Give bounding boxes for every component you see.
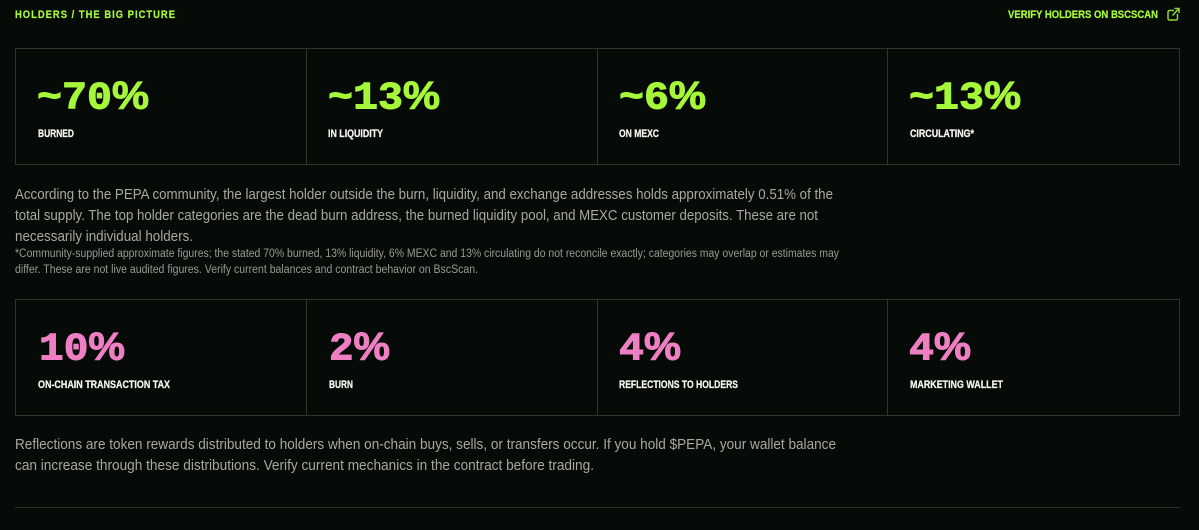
stat: in liquidity: ~13% [328,74,440,120]
stat: burned: ~70% [37,74,149,120]
stat: burned: BURNED [38,128,74,140]
stat: transaction tax [38,326,171,391]
stat: in liquidity [328,74,440,140]
icon: external link [1168,8,1179,20]
stat: on MEXC: ON MEXC [619,128,659,140]
panel: tax stats [16,300,1180,416]
stat: circulating: CIRCULATING* [910,128,975,140]
stat: circulating: ~13% [909,74,1021,120]
panel: holder stats [16,48,1180,164]
stat: reflections: REFLECTIONS TO HOLDERS [619,379,738,391]
stat: marketing wallet [909,326,1003,391]
stat: transaction tax: ON-CHAIN TRANSACTION TAX [38,379,171,391]
footnote: differ. These are not live audited figures. Verify current balances and contract behavior on BscScan. [15,264,478,276]
footnote: *Community-supplied approximate figures; the stated 70% burned, 13% liquidity, 6% MEXC and 13% circulating do not reconcile exactly; categories may overlap or estimates may [15,248,839,260]
stat: burned [37,74,149,140]
stat: on MEXC [619,74,706,140]
stat: marketing wallet: 4% [909,326,971,372]
stat: burn [329,326,390,391]
text block: holder summary: total supply. The top holder categories are the dead burn address, the burned liquidity pool, and MEXC customer deposits. These are not [15,208,818,224]
stat: reflections: 4% [619,326,681,372]
footnote [15,248,839,276]
stat: on MEXC: ~6% [619,74,706,120]
stat: transaction tax: 10% [39,326,125,372]
link: verify holders on BscScan: VERIFY HOLDERS ON BSCSCAN [1008,9,1158,21]
stat: burn: 2% [329,326,390,372]
text block: holder summary [15,187,833,245]
stat: burn: BURN [329,379,353,391]
text block: holder summary: According to the PEPA community, the largest holder outside the burn, liquidity, and exchange addresses holds approximately 0.51% of the [15,187,833,203]
stat: marketing wallet: MARKETING WALLET [910,379,1003,391]
text block: reflections explanation [15,437,836,474]
text block: reflections explanation: can increase through these distributions. Verify current mechanics in the contract before trading. [15,458,594,474]
stat: circulating [909,74,1021,140]
stat: reflections [619,326,738,391]
text block: holder summary: necessarily individual holders. [15,229,193,245]
stat: in liquidity: IN LIQUIDITY [328,128,384,140]
text block: reflections explanation: Reflections are token rewards distributed to holders when on-chain buys, sells, or transfers occur. If you hold $PEPA, your wallet balance [15,437,836,453]
heading: holders big picture: HOLDERS / THE BIG PICTURE [15,9,176,21]
